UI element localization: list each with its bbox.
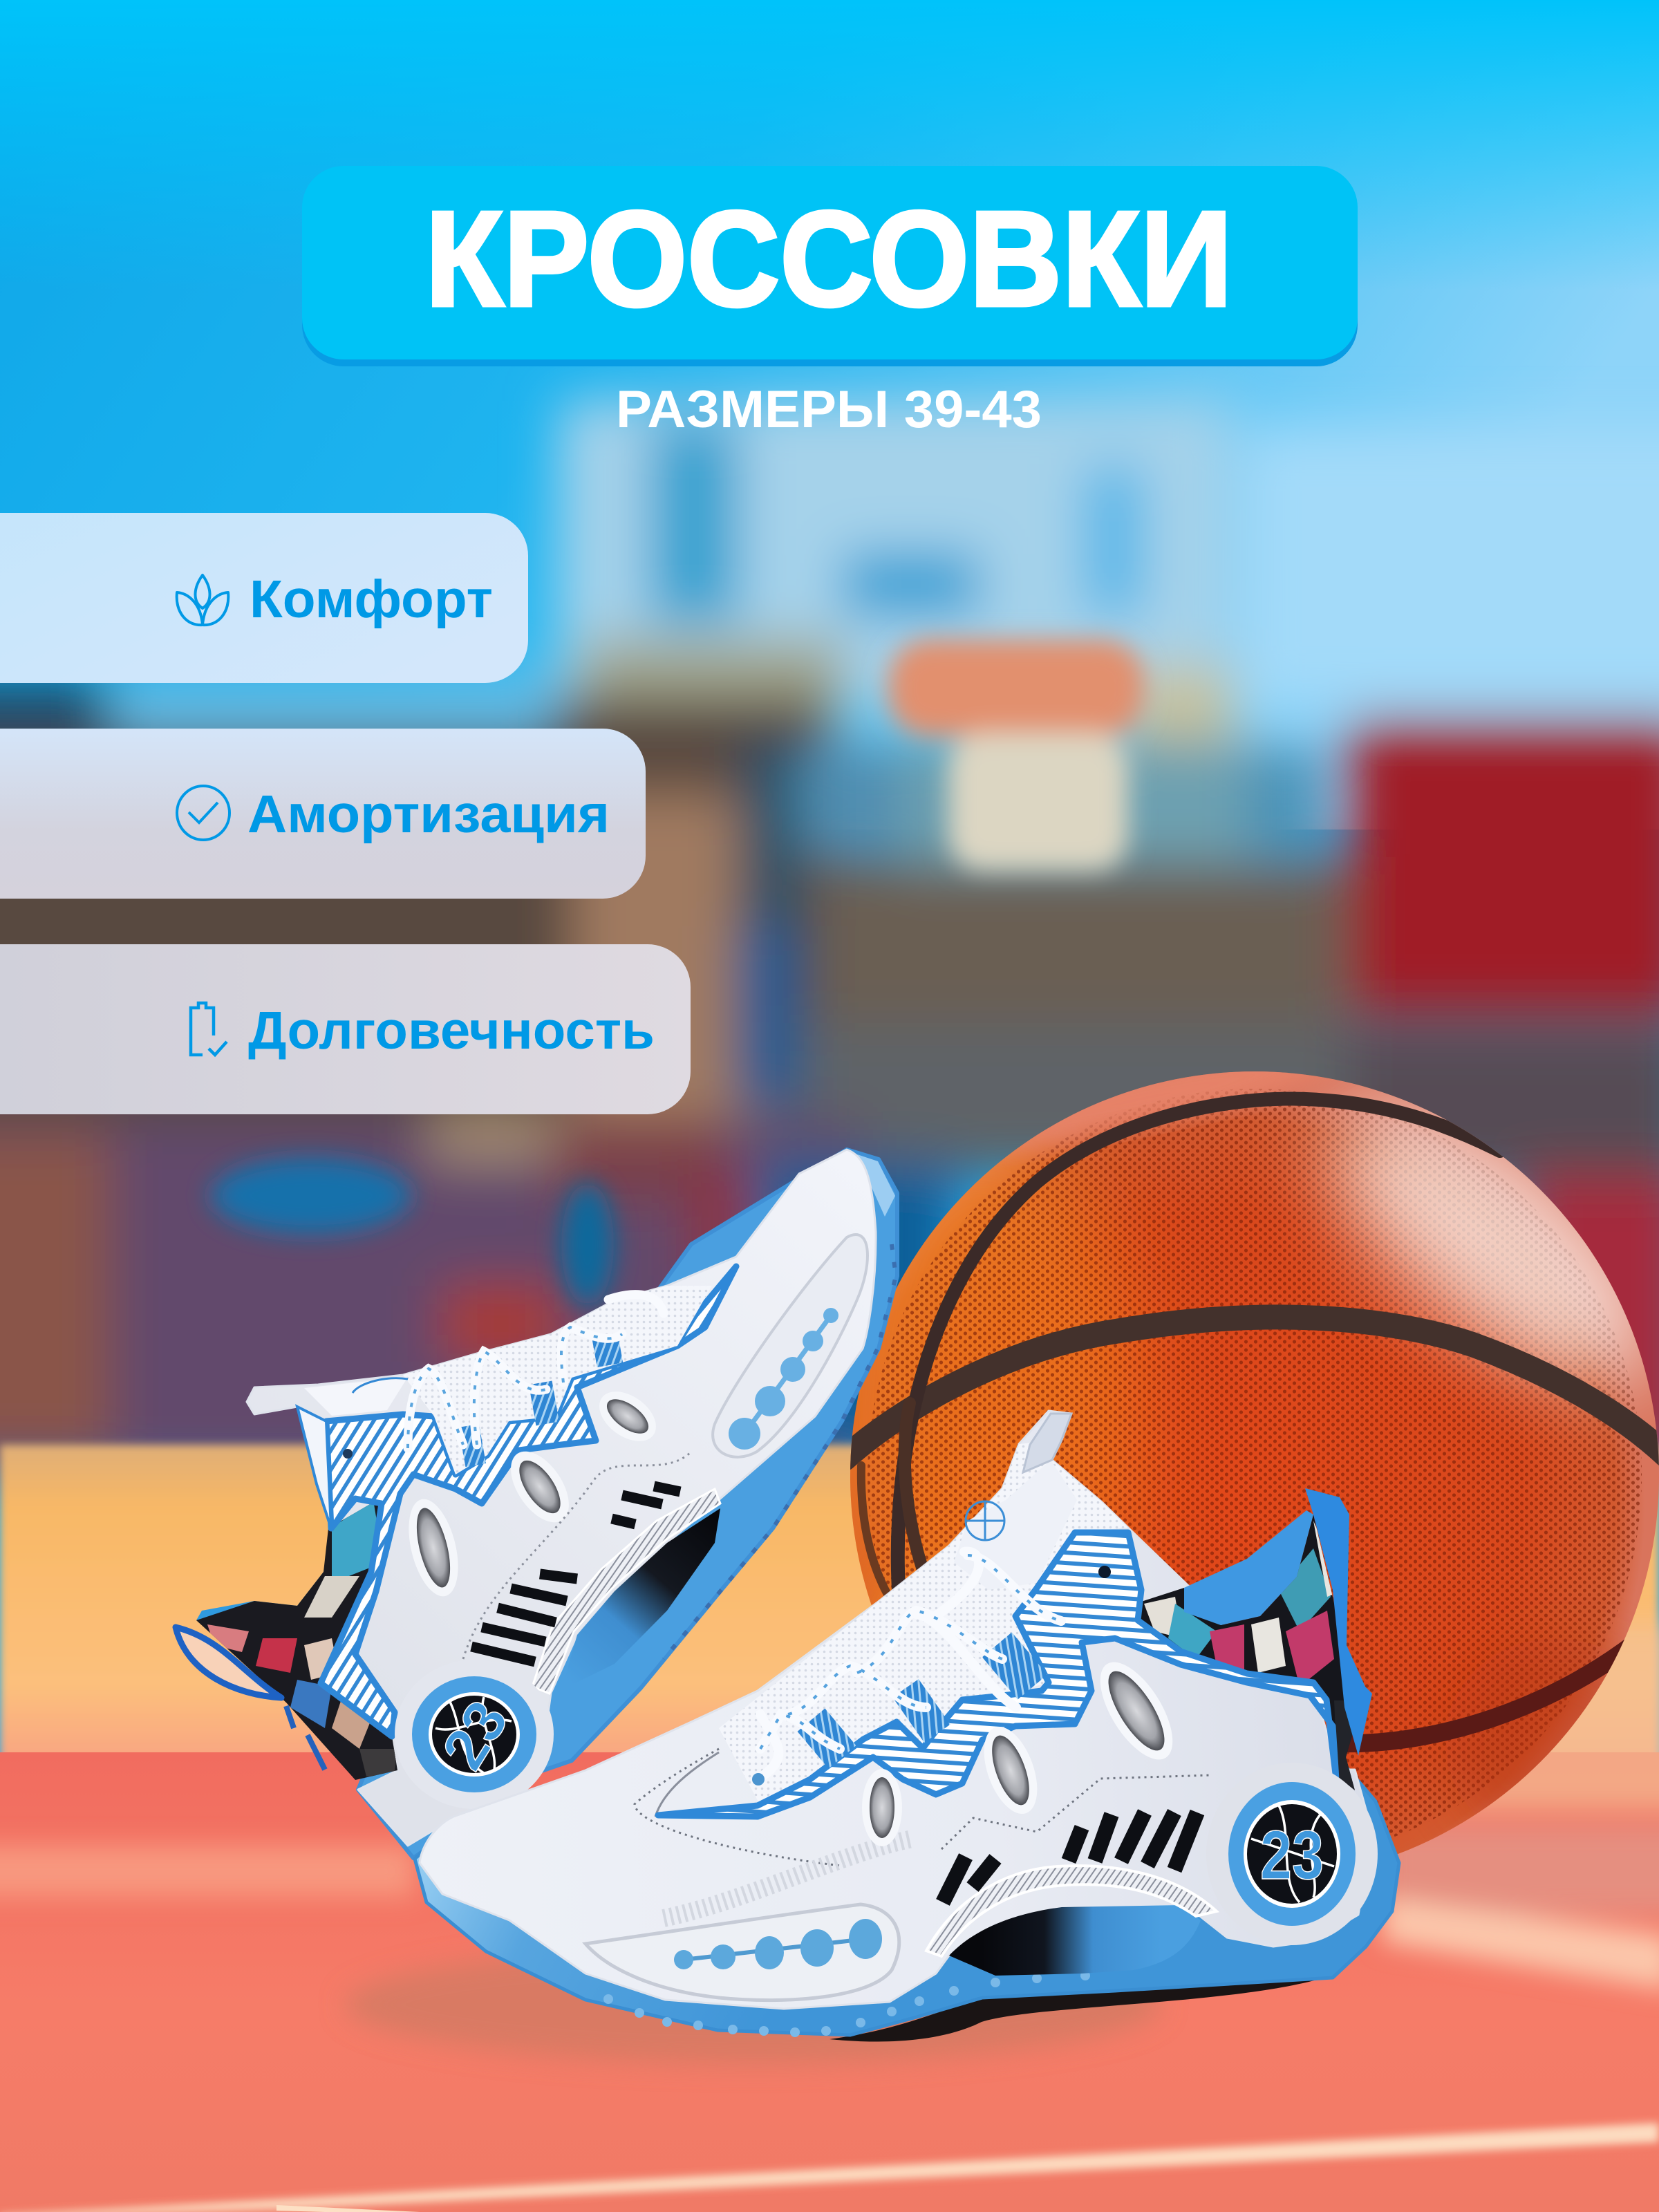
court line at bottom xyxy=(0,2123,1659,2212)
icon: leaf xyxy=(177,575,228,625)
title text: КРОССОВКИ xyxy=(425,183,1232,335)
front tongue and mesh xyxy=(719,1440,1128,1806)
front upper and midsole xyxy=(420,1411,1372,2009)
back hatch band xyxy=(532,1489,720,1694)
front hatch band xyxy=(926,1866,1217,1956)
label: durability: Долговечность xyxy=(248,1001,655,1060)
front toe dots xyxy=(674,1919,882,1969)
back lace area xyxy=(304,1286,712,1474)
front stripe band xyxy=(658,1533,1336,1817)
front heel wheel: 23 xyxy=(1260,1817,1324,1894)
front shadow under sole xyxy=(830,1976,1331,2042)
feature panel: cushioning xyxy=(0,729,646,899)
back sole xyxy=(358,1150,897,1858)
title banner xyxy=(302,166,1358,366)
ball seams xyxy=(845,1099,1659,1743)
back arch xyxy=(561,1508,720,1690)
basketball xyxy=(850,1071,1659,1854)
front sneaker xyxy=(415,1411,1399,2042)
back upper and midsole xyxy=(247,1150,876,1846)
feature panel: comfort xyxy=(0,513,528,683)
back mesh ankle xyxy=(297,1407,331,1528)
front toe bumper xyxy=(585,1904,899,2000)
front ovals xyxy=(862,1651,1187,1846)
label: cushioning: Амортизация xyxy=(247,785,610,844)
front stitching xyxy=(635,1749,1212,1866)
back heel wheel xyxy=(395,1660,554,1809)
subtitle: sizes: РАЗМЕРЫ 39-43 xyxy=(616,380,1042,439)
label: comfort: Комфорт xyxy=(250,570,493,629)
back black slits xyxy=(471,1486,680,1662)
back collar xyxy=(196,1533,346,1645)
back heel wheel: 23 xyxy=(430,1689,521,1781)
front heel wheel xyxy=(1206,1763,1378,1945)
front black slits xyxy=(943,1812,1197,1902)
front laces xyxy=(752,1552,1061,1785)
icon: check circle xyxy=(177,786,229,840)
back ovals xyxy=(400,1382,665,1602)
front heel tab xyxy=(1305,1488,1372,1756)
front arch xyxy=(949,1905,1201,1976)
back stripe band xyxy=(321,1266,736,1736)
icon: battery with check xyxy=(191,1003,227,1055)
front graffiti and collar xyxy=(1134,1507,1369,1797)
back dot capsule xyxy=(713,1235,868,1457)
front sole xyxy=(415,1728,1399,2035)
feature panel: durability xyxy=(0,944,691,1114)
back graffiti panel xyxy=(194,1500,408,1783)
back sneaker xyxy=(176,1150,897,1858)
back heel loop xyxy=(176,1627,281,1698)
